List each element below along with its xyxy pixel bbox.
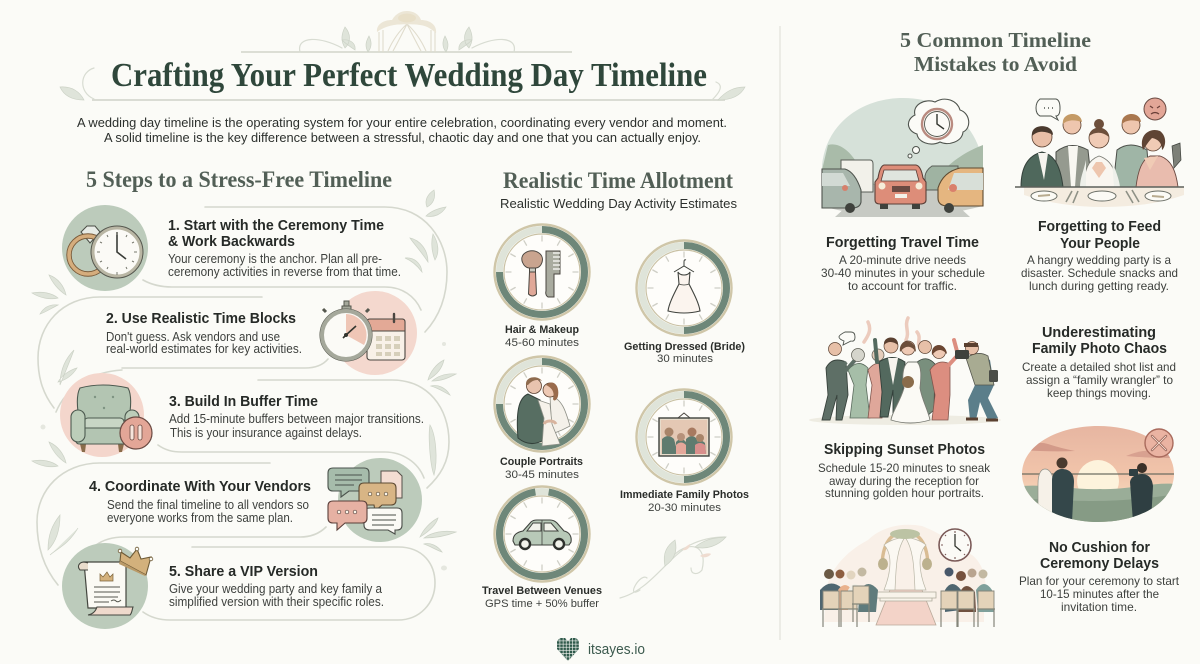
- clock dial: [636, 390, 732, 484]
- mistake text: A 20-minute drive needs: [839, 253, 966, 267]
- mistake: no cushion for ceremony delays text: No Cushion for: [1049, 540, 1150, 556]
- step 3 text: 3. Build In Buffer Time: [169, 394, 318, 410]
- activity: travel between venues: [482, 485, 602, 610]
- mistake: forgetting to feed your people: [1015, 98, 1184, 293]
- heading: realistic time allotment: [500, 168, 737, 211]
- table and plates: [1015, 186, 1184, 188]
- step 4 text: 4. Coordinate With Your Vendors: [89, 479, 311, 495]
- step 1 text: [168, 218, 401, 279]
- icon: stopwatch and calendar: [320, 291, 417, 375]
- person: bride: [1084, 156, 1118, 187]
- clock dial: [636, 240, 732, 336]
- heading: common mistakes: 5 Common Timeline: [900, 28, 1091, 52]
- clock dial: [494, 224, 590, 320]
- step 1 text: & Work Backwards: [168, 234, 295, 250]
- step 3 text: [169, 394, 424, 440]
- mistake text: Forgetting to Feed: [1038, 219, 1161, 235]
- step 3: [60, 373, 424, 457]
- decorative floral sprig: [620, 537, 726, 598]
- step 1 text: 1. Start with the Ceremony Time: [168, 218, 384, 234]
- illustration: family photo chaos: [809, 318, 1001, 425]
- relative pointing: [822, 360, 848, 420]
- illustration: hungry wedding party: [1015, 98, 1184, 207]
- mistake: underestimating family photo chaos text: Family Photo Chaos: [1032, 341, 1167, 357]
- mistake text: Forgetting Travel Time: [826, 235, 979, 251]
- clock dial: [494, 356, 590, 452]
- mistake: no cushion for ceremony delays text: 10-15 minutes after the: [1040, 587, 1159, 601]
- person: sage suit: [1113, 145, 1150, 187]
- title: Crafting Your Perfect Wedding Day Timeline: [111, 57, 707, 94]
- groom: [879, 358, 905, 417]
- icon: wedding dress: [668, 260, 700, 313]
- step 5 text: 5. Share a VIP Version: [169, 564, 318, 580]
- step 4: [89, 458, 422, 542]
- column divider: [779, 26, 781, 640]
- label: 30 minutes: [657, 353, 714, 365]
- icon: car: [513, 520, 571, 549]
- label: GPS time + 50% buffer: [485, 598, 599, 610]
- mistake: no cushion for ceremony delays text: Ceremony Delays: [1040, 556, 1159, 572]
- mistake: no cushion for ceremony delays text: invitation time.: [1061, 600, 1137, 614]
- mistake: underestimating family photo chaos text: [1022, 325, 1176, 400]
- mistake: skipping sunset photos text: Skipping Sunset Photos: [824, 442, 985, 458]
- person: gray suit: [1056, 145, 1092, 187]
- mistake: no cushion for ceremony delays text: [1019, 540, 1180, 614]
- step 4 text: [89, 479, 311, 525]
- photographer: [968, 357, 998, 420]
- label: Immediate Family Photos: [620, 489, 749, 501]
- step 5 text: [169, 564, 384, 609]
- heading: common mistakes: [900, 28, 1091, 76]
- guests left: [820, 583, 844, 625]
- label: Travel Between Venues: [482, 585, 602, 597]
- label: Couple Portraits: [500, 456, 583, 468]
- intro text: A wedding day timeline is the operating system for your entire celebration, coordinating every vendor and moment.: [77, 115, 727, 130]
- step 2 text: real-world estimates for key activities.: [106, 342, 302, 356]
- mistake text: disaster. Schedule snacks and: [1021, 266, 1178, 280]
- activity: couple portraits: [494, 356, 590, 481]
- thought bubble with clock: [908, 99, 969, 158]
- icon: chat bubbles: [328, 458, 422, 542]
- mistake text: Your People: [1060, 236, 1140, 252]
- step 5 text: simplified version with their specific roles.: [169, 595, 384, 609]
- mistake: underestimating family photo chaos text: Create a detailed shot list and: [1022, 360, 1176, 374]
- step 2 text: Don't guess. Ask vendors and use: [106, 330, 280, 344]
- angry emoji: [1144, 98, 1166, 120]
- intro text: [77, 115, 727, 145]
- speech bubble: [1036, 99, 1060, 120]
- mistake: underestimating family photo chaos text: Underestimating: [1042, 325, 1156, 341]
- step 1: [62, 205, 401, 291]
- label: [482, 585, 602, 610]
- mistake: no cushion for ceremony delays text: Plan for your ceremony to start: [1019, 574, 1180, 588]
- step 2: [106, 291, 417, 375]
- label: [500, 456, 583, 481]
- step 2 text: [106, 311, 302, 356]
- icon: brush and comb: [522, 251, 560, 297]
- mistake: skipping sunset photos text: stunning golden hour portraits.: [825, 486, 984, 500]
- mistake text: 30-40 minutes in your schedule: [821, 266, 985, 280]
- brand logo: [557, 638, 645, 661]
- mistake text: [1021, 219, 1178, 293]
- label: [620, 489, 749, 514]
- label: 20-30 minutes: [648, 502, 722, 514]
- label: Hair & Makeup: [505, 324, 579, 336]
- step 5: [62, 543, 384, 629]
- mistake: skipping sunset photos text: away during the reception for: [829, 474, 979, 488]
- step 4 text: everyone works from the same plan.: [107, 511, 293, 525]
- illustration: sunset portrait scene: [1020, 424, 1176, 524]
- mistake text: lunch during getting ready.: [1029, 279, 1169, 293]
- activity: getting dressed: [624, 240, 745, 365]
- title underline flourish: [60, 68, 745, 100]
- step 4 text: Send the final timeline to all vendors so: [107, 498, 309, 512]
- mistake: underestimating family photo chaos text: assign a “family wrangler” to: [1026, 373, 1173, 387]
- intro text: A solid timeline is the key difference between a stressful, chaotic day and one that you can actually enjoy.: [104, 130, 701, 145]
- woman in coral: [930, 362, 950, 420]
- label: [505, 324, 580, 349]
- mistake: underestimating family photo chaos text: keep things moving.: [1047, 386, 1151, 400]
- mistake text: [821, 235, 985, 293]
- header ornament: floral arch: [241, 11, 572, 52]
- grandmother pink: [868, 363, 886, 418]
- person: woman in pink: [1136, 156, 1178, 187]
- grandmother green: [848, 363, 870, 418]
- icon: armchair with pause button: [60, 373, 152, 457]
- brand logo: itsayes.io: [588, 641, 645, 658]
- label: [624, 341, 745, 365]
- step 3 text: This is your insurance against delays.: [170, 426, 362, 440]
- activity: hair and makeup: [494, 224, 590, 349]
- mistake text: to account for traffic.: [848, 279, 957, 293]
- icon: rings and clock: [62, 205, 148, 291]
- icon: embracing couple: [517, 377, 570, 446]
- heading: common mistakes: Mistakes to Avoid: [914, 52, 1077, 76]
- step 3 text: Add 15-minute buffers between major transitions.: [169, 412, 424, 426]
- person: groom: [1021, 152, 1063, 187]
- heading: realistic time allotment: Realistic Time Allotment: [503, 168, 733, 193]
- ribbon connecting the steps: [37, 207, 449, 620]
- bride: [891, 362, 930, 423]
- activity: family photos: [620, 390, 749, 514]
- heading: 5 steps: 5 Steps to a Stress-Free Timeline: [86, 167, 392, 192]
- label: 30-45 minutes: [505, 469, 580, 481]
- illustration: traffic jam: [822, 98, 983, 217]
- decorative leaves around steps: [32, 190, 456, 570]
- heading: realistic time allotment: Realistic Wedding Day Activity Estimates: [500, 196, 737, 211]
- mistake text: A hangry wedding party is a: [1027, 253, 1171, 267]
- illustration: ceremony with waiting guests: [820, 525, 995, 627]
- label: Getting Dressed (Bride): [624, 341, 745, 353]
- mistake: forgetting travel time: [821, 98, 985, 293]
- step 5 text: Give your wedding party and key family a: [169, 582, 382, 596]
- step 1 text: ceremony activities in reverse from that time.: [168, 265, 401, 279]
- step 1 text: Your ceremony is the anchor. Plan all pre-: [168, 252, 382, 266]
- icon: scroll and crown: [62, 543, 153, 629]
- icon: framed family photo: [659, 413, 709, 456]
- label: 45-60 minutes: [505, 337, 580, 349]
- guests right: [945, 584, 961, 612]
- mistake: skipping sunset photos text: Schedule 15-20 minutes to sneak: [818, 461, 991, 475]
- step 2 text: 2. Use Realistic Time Blocks: [106, 311, 296, 327]
- man behind, sage: [912, 359, 935, 417]
- clock dial: [493, 485, 591, 583]
- mistake: skipping sunset photos text: [818, 442, 991, 500]
